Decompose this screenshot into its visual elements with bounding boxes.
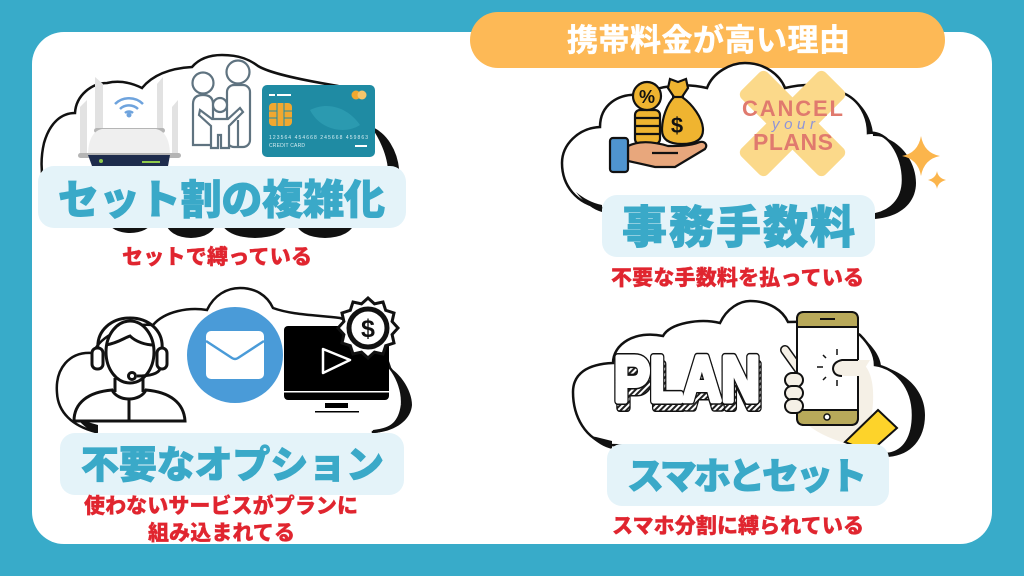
icon: video monitor [284,326,389,412]
icon: cancel your plans: CANCEL [742,96,843,121]
icon: support agent [74,318,185,421]
title banner: 携帯料金が高い理由 [567,23,850,58]
caption: 不要な手数料を払っている [611,267,864,290]
icon: cancel your plans [737,68,848,179]
title banner [470,12,945,68]
cloud [57,288,412,438]
icon: PLAN lettering: PLAN [616,350,762,422]
icon: cancel your plans: your [771,116,816,133]
panel: admin fees [562,63,946,290]
panel: bundle discounts [38,55,406,269]
cloud [42,55,398,238]
icon: PLAN lettering: PLAN [614,343,760,415]
panel: unnecessary options [57,288,412,545]
icon: PLAN lettering: PLAN [616,350,762,422]
heading: 事務手数料 [622,202,855,253]
heading: セット割の複雑化 [58,177,385,223]
icon: cancel your plans: PLANS [753,129,833,155]
heading box [602,195,875,257]
caption: 使わないサービスがプランに [84,494,358,518]
caption: スマホ分割に縛られている [612,514,864,538]
icon: family [192,60,250,148]
heading: スマホとセット [627,456,867,497]
icon: PLAN lettering: PLAN [614,343,760,415]
icon: money on hand [610,79,706,172]
cloud [573,301,925,457]
icon: money on hand: % [639,87,655,107]
heading box [607,444,889,506]
icon: dollar badge [338,298,398,358]
icon: credit card [262,85,375,157]
caption: 組み込まれてる [148,522,295,545]
icon: mail [187,307,283,403]
heading box [38,166,406,228]
caption: セットで縛っている [122,245,312,269]
icon: sparkles [902,136,946,189]
panel: phone bundle [573,301,925,538]
heading: 不要なオプション [81,445,384,487]
cloud [562,63,916,219]
icon: money on hand: $ [671,113,683,138]
icon: wifi router [78,77,181,166]
icon: credit card: 123564 454668 245668 459863 [269,135,368,141]
icon: dollar badge: $ [361,315,375,343]
icon: hand holding phone [785,312,897,452]
caption [84,494,358,545]
heading box [60,433,404,495]
icon: credit card: CREDIT CARD [269,143,305,149]
